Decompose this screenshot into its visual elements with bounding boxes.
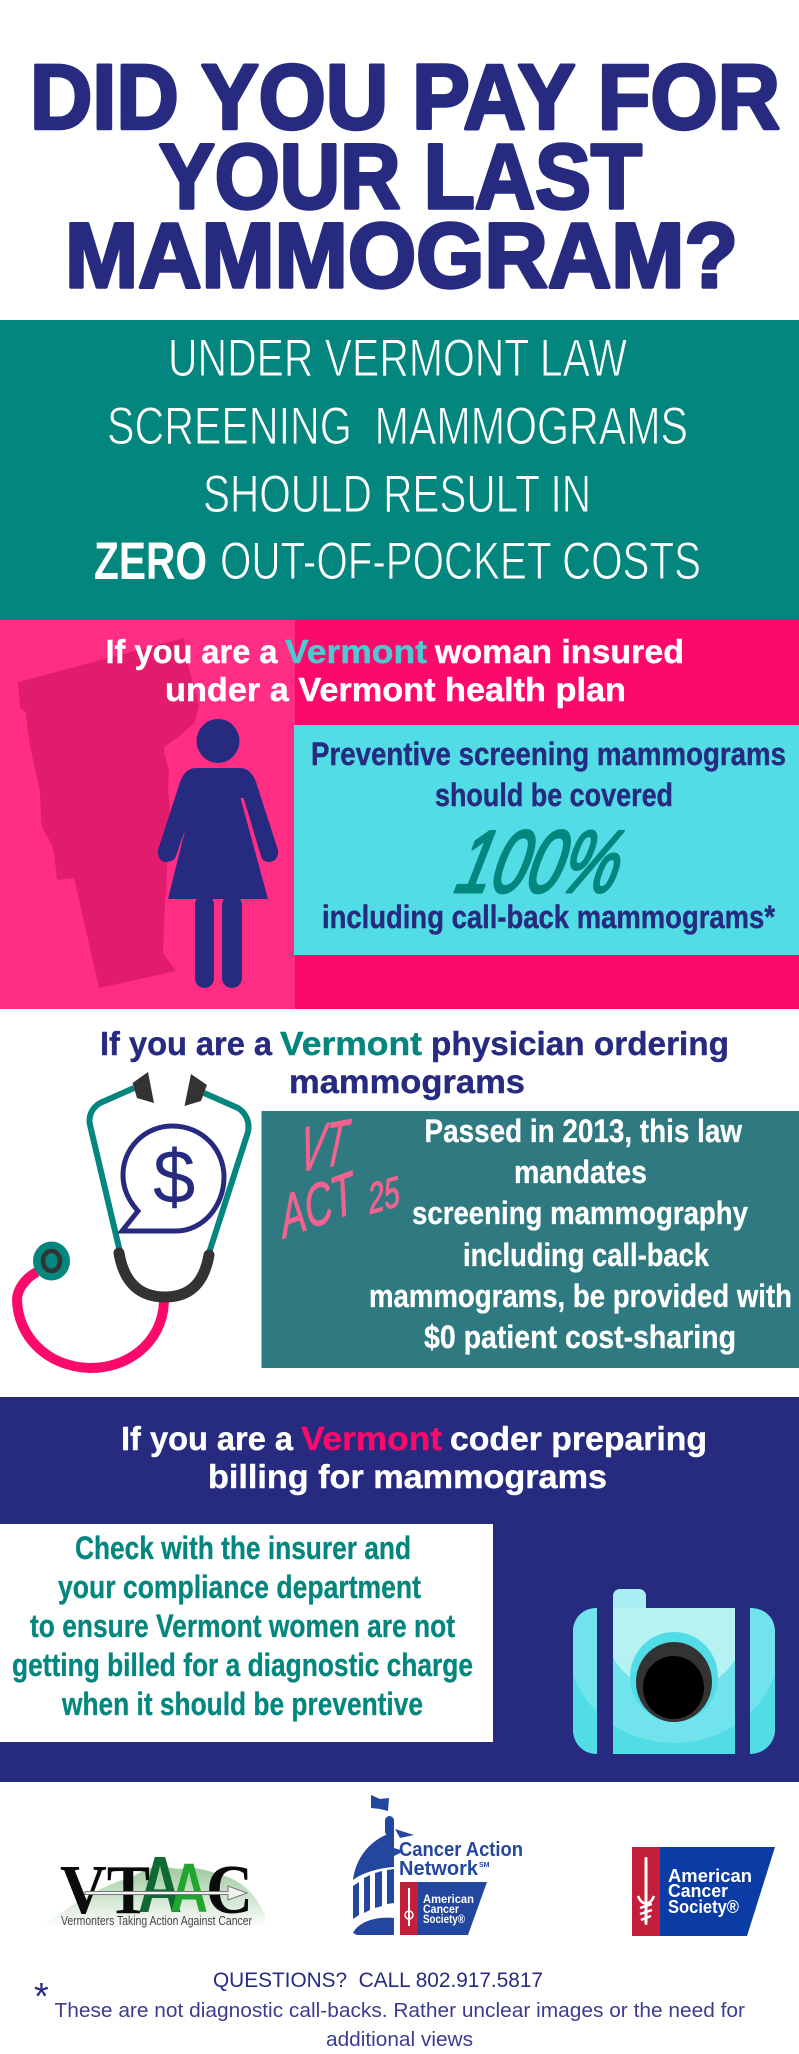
banner text: UNDER VERMONT LAW: [168, 329, 627, 388]
panel: vermont physician: [17, 1025, 799, 1368]
title: MAMMOGRAM?: [65, 205, 738, 307]
heading: woman insured: [434, 633, 684, 670]
icon: camera: [573, 1589, 775, 1754]
logo: vtaac: Vermonters Taking Action Against Cancer: [61, 1913, 253, 1928]
advice box: when it should be preventive: [61, 1686, 423, 1722]
heading: physician ordering: [431, 1025, 729, 1062]
banner text: SHOULD RESULT IN: [203, 465, 591, 524]
logo: vtaac: VT: [60, 1852, 150, 1929]
woman icon: [158, 719, 278, 988]
heading: mammograms: [289, 1063, 525, 1100]
footnote: These are not diagnostic call-backs. Rather unclear images or the need for: [54, 2000, 745, 2022]
icon: stethoscope: [17, 1072, 249, 1368]
logo: cancer action network: [353, 1795, 523, 1935]
logo: cancer action network: Cancer: [423, 1904, 459, 1916]
law box: mandates: [514, 1154, 647, 1190]
icon: speech bubble with dollar: [122, 1126, 224, 1231]
icon: speech bubble with dollar: $: [153, 1135, 195, 1220]
logo: american cancer society: American: [668, 1865, 752, 1886]
asterisk: *: [34, 1976, 49, 2018]
law box: screening mammography: [412, 1195, 748, 1231]
heading: coder preparing: [450, 1420, 707, 1457]
logo: vtaac: C: [206, 1852, 253, 1929]
logo: cancer action network: SM: [479, 1862, 490, 1869]
heading: under a Vermont health plan: [165, 671, 626, 708]
coverage box: [294, 725, 799, 955]
heading: [100, 1025, 729, 1100]
logo: vtaac: [41, 1840, 265, 1929]
vt act 25: VT: [297, 1106, 354, 1186]
logo: cancer action network: Network: [399, 1858, 479, 1880]
coverage box: should be covered: [435, 777, 673, 813]
banner text: [94, 329, 701, 591]
title: [30, 46, 780, 307]
law box: including call-back: [463, 1237, 709, 1273]
logo: vtaac: A: [170, 1849, 208, 1927]
banner text: ZERO: [94, 532, 207, 591]
panel: vermont coder: [0, 1397, 799, 1782]
heading: Vermont: [301, 1420, 442, 1457]
vt act 25: 25: [365, 1167, 402, 1223]
vt act 25: [273, 1106, 402, 1252]
heading: Vermont: [280, 1025, 422, 1062]
heading: billing for mammograms: [208, 1458, 607, 1495]
advice box: to ensure Vermont women are not: [30, 1608, 455, 1644]
logo: vtaac: A: [138, 1840, 182, 1929]
panel: vermont law banner: [0, 320, 799, 620]
logo: american cancer society: Society®: [668, 1896, 739, 1917]
footnote: [34, 1976, 745, 2051]
panel: vermont woman: [0, 620, 799, 1009]
heading: If you are a: [106, 633, 278, 670]
map of vermont: [18, 638, 199, 988]
heading: If you are a: [100, 1025, 273, 1062]
advice box: getting billed for a diagnostic charge: [12, 1647, 473, 1683]
heading: If you are a: [121, 1420, 294, 1457]
advice box: [0, 1524, 493, 1742]
logo: cancer action network: Society®: [423, 1914, 465, 1926]
heading: [106, 633, 684, 708]
heading: Vermont: [285, 633, 427, 670]
advice box: your compliance department: [58, 1569, 421, 1605]
questions line: QUESTIONS? CALL 802.917.5817: [213, 1969, 543, 1992]
logo: american cancer society: Cancer: [668, 1880, 728, 1901]
logo: cancer action network: American: [423, 1894, 474, 1906]
footnote: additional views: [326, 2029, 473, 2051]
100 percent: 100%: [448, 812, 635, 911]
vt act 25: ACT: [273, 1159, 362, 1252]
advice box: Check with the insurer and: [75, 1530, 411, 1566]
heading: [121, 1420, 707, 1495]
logo: cancer action network: Cancer Action: [399, 1839, 523, 1861]
logo: american cancer society: [632, 1847, 775, 1936]
law box: [262, 1106, 799, 1368]
law box: Passed in 2013, this law: [424, 1113, 742, 1149]
law box: $0 patient cost-sharing: [424, 1319, 736, 1355]
title: YOUR LAST: [159, 126, 642, 228]
